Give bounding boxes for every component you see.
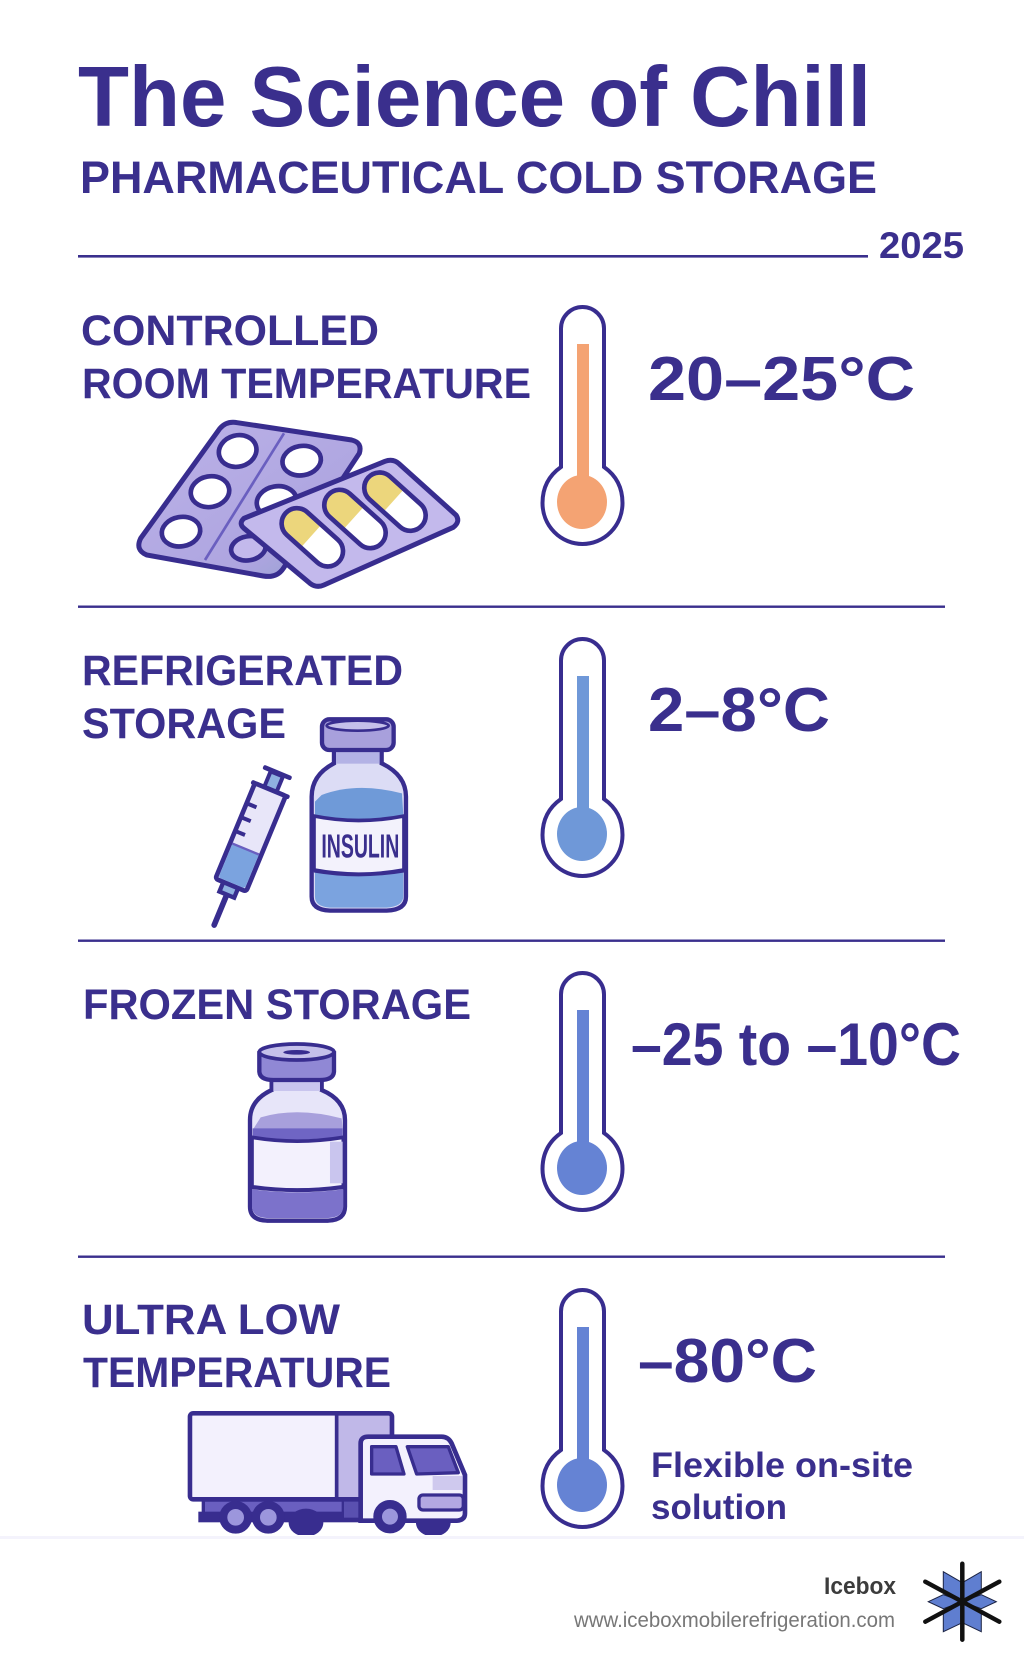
heading: ultra low temperature	[82, 1296, 391, 1397]
icon: thermometer blue	[542, 973, 622, 1210]
heading: controlled room temperature: ROOM TEMPERATURE	[82, 360, 531, 408]
heading: controlled room temperature: CONTROLLED	[81, 307, 379, 355]
heading: ultra low temperature: ULTRA LOW	[82, 1296, 340, 1344]
icon: frozen vial	[250, 1044, 345, 1221]
icon: thermometer orange	[542, 307, 622, 544]
temperature: 2-8: 2–8°C	[648, 676, 830, 745]
icon: blister packs	[139, 422, 458, 586]
note: flexible on-site solution	[651, 1446, 913, 1527]
panel: refrigerated storage	[82, 639, 830, 933]
temperature: -25 to -10: –25 to –10°C	[631, 1011, 961, 1078]
heading: frozen storage: FROZEN STORAGE	[83, 981, 471, 1029]
title: The Science of Chill	[78, 50, 871, 145]
icon: refrigerated truck	[190, 1413, 465, 1537]
panel: ultra low temperature	[82, 1290, 913, 1537]
label text: INSULIN	[321, 829, 399, 866]
icon: syringe and insulin vial	[195, 719, 406, 933]
note: flexible on-site solution: solution	[651, 1488, 787, 1527]
heading: controlled room temperature	[81, 307, 531, 408]
panel: frozen storage	[83, 973, 961, 1221]
heading: refrigerated storage: REFRIGERATED	[82, 647, 403, 695]
heading: ultra low temperature: TEMPERATURE	[83, 1349, 391, 1397]
note: flexible on-site solution: Flexible on-site	[651, 1446, 913, 1485]
icon: thermometer blue	[542, 1290, 622, 1527]
heading: refrigerated storage: STORAGE	[82, 700, 286, 748]
brand name: Icebox	[824, 1573, 897, 1600]
temperature: 20-25: 20–25°C	[648, 345, 915, 414]
year: 2025	[879, 225, 964, 266]
icon: syringe	[195, 763, 297, 933]
header rule	[78, 255, 868, 258]
website: www.iceboxmobilerefrigeration.com	[573, 1609, 895, 1632]
heading: refrigerated storage	[82, 647, 403, 748]
footer	[0, 1535, 1024, 1666]
temperature: -80: –80°C	[638, 1327, 817, 1396]
icon: snowflake logo	[925, 1564, 999, 1640]
subtitle: PHARMACEUTICAL COLD STORAGE	[80, 152, 877, 203]
icon: thermometer blue	[542, 639, 622, 876]
panel: controlled room temperature	[81, 307, 915, 586]
icon: insulin vial	[312, 719, 406, 911]
